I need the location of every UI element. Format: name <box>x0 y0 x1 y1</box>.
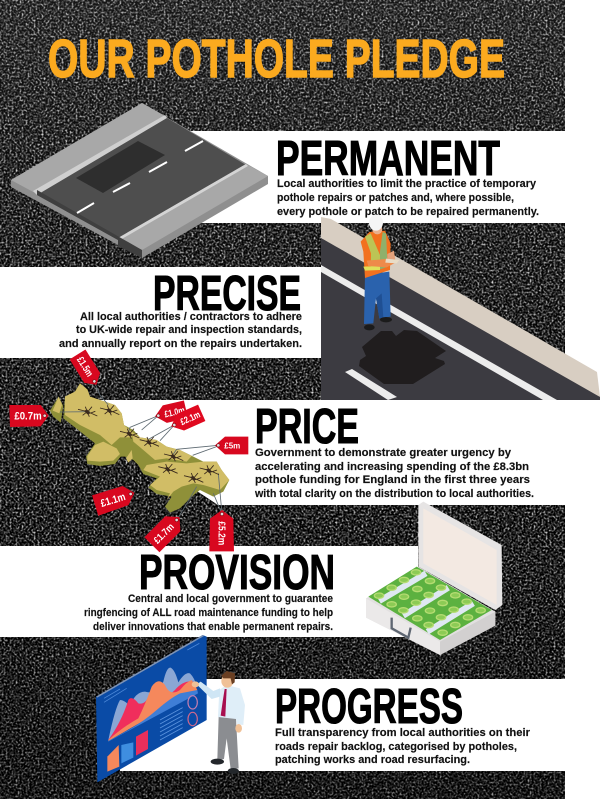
tag: £0.7m <box>9 405 49 427</box>
panel: provision: Central and local government to guarantee <box>128 593 333 605</box>
panel: permanent: every pothole or patch to be repaired permanently. <box>277 206 539 218</box>
panel: progress: PROGRESS <box>275 680 463 734</box>
tag: £1.7m: £1.7m <box>152 522 177 546</box>
tag: £5m <box>215 437 248 454</box>
tag: £1.5m <box>70 350 104 390</box>
tag: £0.7m: £0.7m <box>14 411 42 423</box>
data screen <box>96 635 207 782</box>
illustration: briefcase of money <box>366 502 502 655</box>
panel: provision: ringfencing of ALL road maintenance funding to help <box>84 607 333 619</box>
panel: price <box>90 400 565 505</box>
panel: precise <box>0 267 322 358</box>
tag: £1.0m: £1.0m <box>163 405 186 419</box>
panel: permanent: pothole repairs or patches and, where possible, <box>277 192 514 204</box>
panel: progress: roads repair backlog, categorised by potholes, <box>275 741 517 753</box>
tag: £1.7m <box>144 510 187 552</box>
tag: £2.1m: £2.1m <box>179 409 202 427</box>
money straps <box>379 573 473 632</box>
panel: precise: and annually report on the repairs undertaken. <box>59 338 302 350</box>
panel: progress: patching works and road resurfacing. <box>275 754 470 766</box>
panel: provision: PROVISION <box>139 546 335 600</box>
pothole patch <box>359 330 446 384</box>
tag: £1.1m: £1.1m <box>99 491 127 510</box>
potholes on map <box>78 405 219 483</box>
bank note rosettes <box>374 570 485 635</box>
map landmass <box>50 383 229 513</box>
panel: price: accelerating and increasing spending of the £8.3bn <box>255 461 529 473</box>
briefcase handle <box>392 618 411 638</box>
panel: permanent: Local authorities to limit the practice of temporary <box>277 178 536 190</box>
panel: precise: PRECISE <box>153 267 301 321</box>
map of UK with cost tags <box>9 350 248 552</box>
presenter figure <box>192 671 245 774</box>
tag: £5.2m: £5.2m <box>215 521 226 545</box>
tag: £5m: £5m <box>224 441 241 451</box>
panel: progress: Full transparency from local authorities on their <box>275 727 531 739</box>
worker figure <box>361 215 399 330</box>
panel: price: with total clarity on the distribution to local authorities. <box>254 488 534 500</box>
illustration: repaired road section <box>11 103 268 258</box>
panel: provision: deliver innovations that enable permanent repairs. <box>93 621 333 633</box>
panel: price: pothole funding for England in the first three years <box>255 474 530 486</box>
tag: £5.2m <box>209 510 234 551</box>
panel: progress <box>120 679 565 771</box>
panel: precise: All local authorities / contractors to adhere <box>80 311 302 323</box>
panel: permanent <box>170 131 565 223</box>
connector lines <box>60 381 222 520</box>
tag: £1.0m <box>153 401 188 425</box>
panel: price: Government to demonstrate greater urgency by <box>255 447 511 459</box>
illustration: presenter with data screen <box>96 635 245 782</box>
illustration: road with pothole <box>321 217 600 400</box>
panel: precise: to UK-wide repair and inspection standards, <box>76 324 302 336</box>
panel: provision <box>0 546 418 637</box>
panel: permanent: PERMANENT <box>276 132 500 186</box>
tag: £1.5m: £1.5m <box>74 355 95 379</box>
tag: £2.1m <box>168 405 205 435</box>
panel: price: PRICE <box>255 400 359 454</box>
tag: £1.1m <box>92 483 138 516</box>
